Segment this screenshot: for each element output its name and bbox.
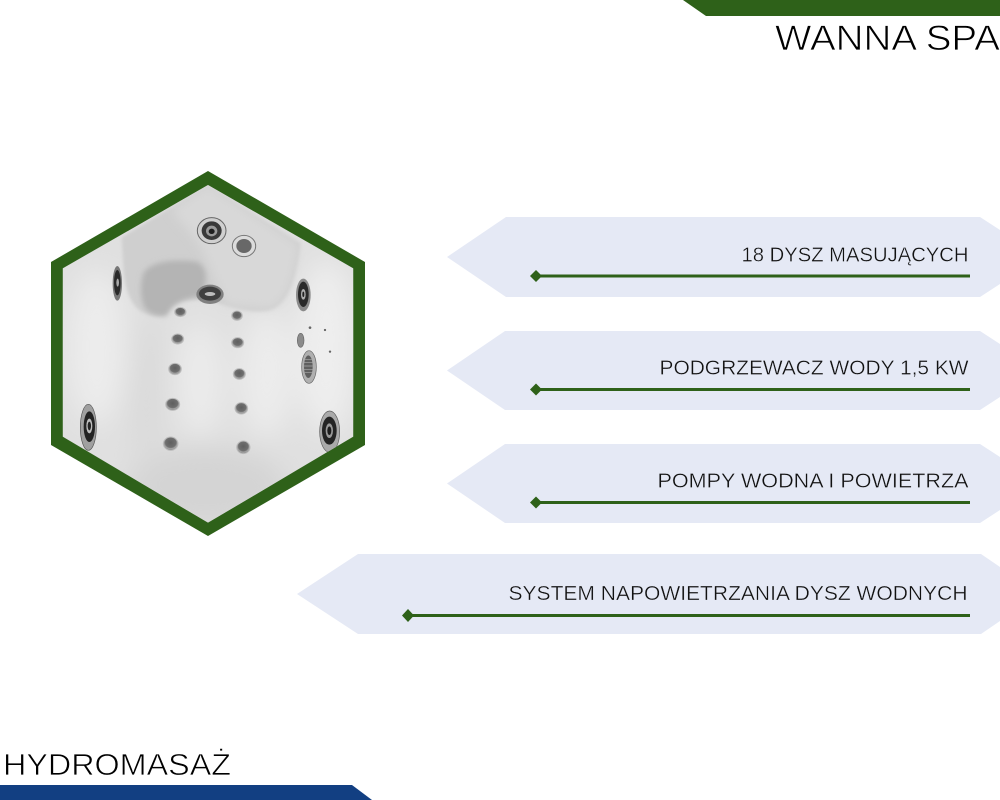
jet: upper left [113,266,122,301]
drain [196,285,224,304]
top green bar [683,0,1000,16]
panel: pompy [447,444,1000,523]
jet: lower left [80,404,96,450]
tub photo [60,183,357,527]
panel: system napowietrzania [297,554,1000,634]
connector line with diamond [530,270,970,282]
small oval fitting [297,333,304,347]
subtitle: HYDROMASAŻ: HYDROMASAŻ [3,747,231,782]
connector line with diamond [530,384,970,396]
title: WANNA SPA: WANNA SPA [775,19,1000,58]
massage jets column: right [232,311,250,454]
panel: 18 dysz masujących [447,217,1000,297]
bottom blue bar [0,785,372,800]
connector line with diamond [530,496,970,508]
air grille [302,351,316,383]
connector line with diamond [402,609,970,622]
speaker [232,235,256,257]
label: SYSTEM NAPOWIETRZANIA DYSZ WODNYCH [508,583,968,605]
panel: podgrzewacz wody [447,331,1000,410]
label: POMPY WODNA I POWIETRZA [658,470,969,492]
massage jets column: left [163,307,186,450]
hexagon frame [51,171,365,536]
label: 18 DYSZ MASUJĄCYCH [742,244,968,266]
jet: upper right [296,279,311,311]
small dots [309,326,331,353]
jet: top head [197,218,226,244]
label: PODGRZEWACZ WODY 1,5 KW [660,358,969,380]
jet: lower right [320,411,340,452]
hexagon photo of spa tub with green frame [51,171,365,536]
